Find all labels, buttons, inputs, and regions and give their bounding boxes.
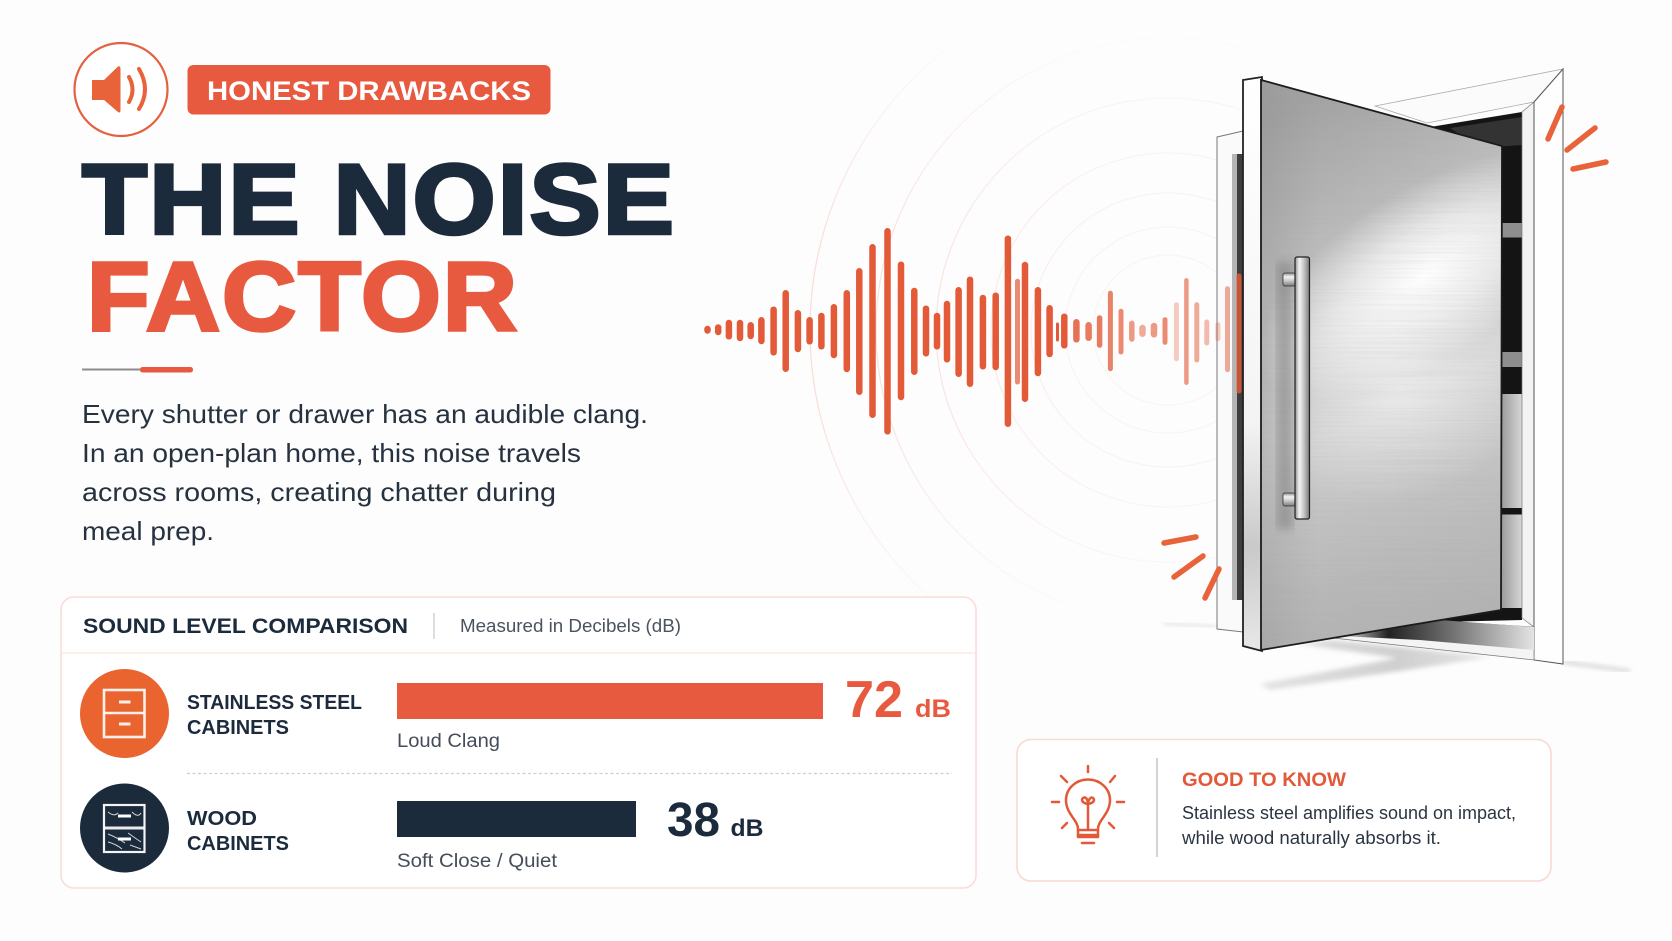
tip text: Stainless steel amplifies sound on impact, (1182, 803, 1516, 823)
waveform (708, 231, 1239, 431)
description text: meal prep. (82, 516, 214, 546)
value: 72 dB: dB (915, 695, 951, 723)
bar: stainless steel (397, 683, 823, 719)
value: 38 dB: dB (730, 815, 764, 842)
panel: good to know (1017, 740, 1551, 881)
label: stainless steel cabinets (187, 692, 362, 739)
unit note: Measured in Decibels (dB) (460, 616, 681, 636)
icon: light bulb (1052, 766, 1124, 843)
panel heading: SOUND LEVEL COMPARISON (83, 615, 408, 638)
icon: speaker (74, 43, 168, 136)
value: 38 dB: 38 (667, 794, 720, 847)
label: wood cabinets: WOOD (187, 808, 257, 830)
title: THE NOISE (82, 144, 676, 254)
badge: honest drawbacks: HONEST DRAWBACKS (207, 76, 531, 106)
description text: In an open-plan home, this noise travels (82, 438, 581, 468)
label: stainless steel cabinets: STAINLESS STEEL (187, 692, 362, 714)
door floor shadows (1163, 623, 1630, 690)
caption: loud clang: Loud Clang (397, 731, 500, 752)
tip text: while wood naturally absorbs it. (1181, 828, 1441, 848)
label: stainless steel cabinets: CABINETS (187, 717, 289, 739)
icon: steel cabinet (80, 669, 169, 758)
value: 72 dB (845, 671, 951, 729)
sound ripples (810, 71, 1242, 580)
label: wood cabinets: CABINETS (187, 833, 289, 855)
value: 38 dB (667, 794, 764, 847)
title (82, 144, 676, 351)
panel: sound level comparison (61, 597, 976, 888)
value: 72 dB: 72 (845, 671, 903, 729)
badge: honest drawbacks (188, 65, 550, 114)
door handle (1277, 257, 1310, 529)
title: FACTOR (87, 242, 519, 351)
caption: soft close: Soft Close / Quiet (397, 851, 558, 872)
icon: wood cabinet (80, 784, 169, 872)
description text (82, 399, 648, 546)
bar: wood (397, 801, 636, 837)
title underline accent (82, 367, 193, 372)
description text: across rooms, creating chatter during (82, 477, 556, 507)
cabinet frame (1217, 69, 1563, 664)
stainless steel door (1243, 70, 1510, 660)
tip text (1181, 803, 1516, 848)
tip heading: GOOD TO KNOW (1182, 770, 1346, 791)
impact marks (1164, 107, 1606, 598)
description text: Every shutter or drawer has an audible clang. (82, 399, 648, 429)
label: wood cabinets (187, 808, 289, 855)
